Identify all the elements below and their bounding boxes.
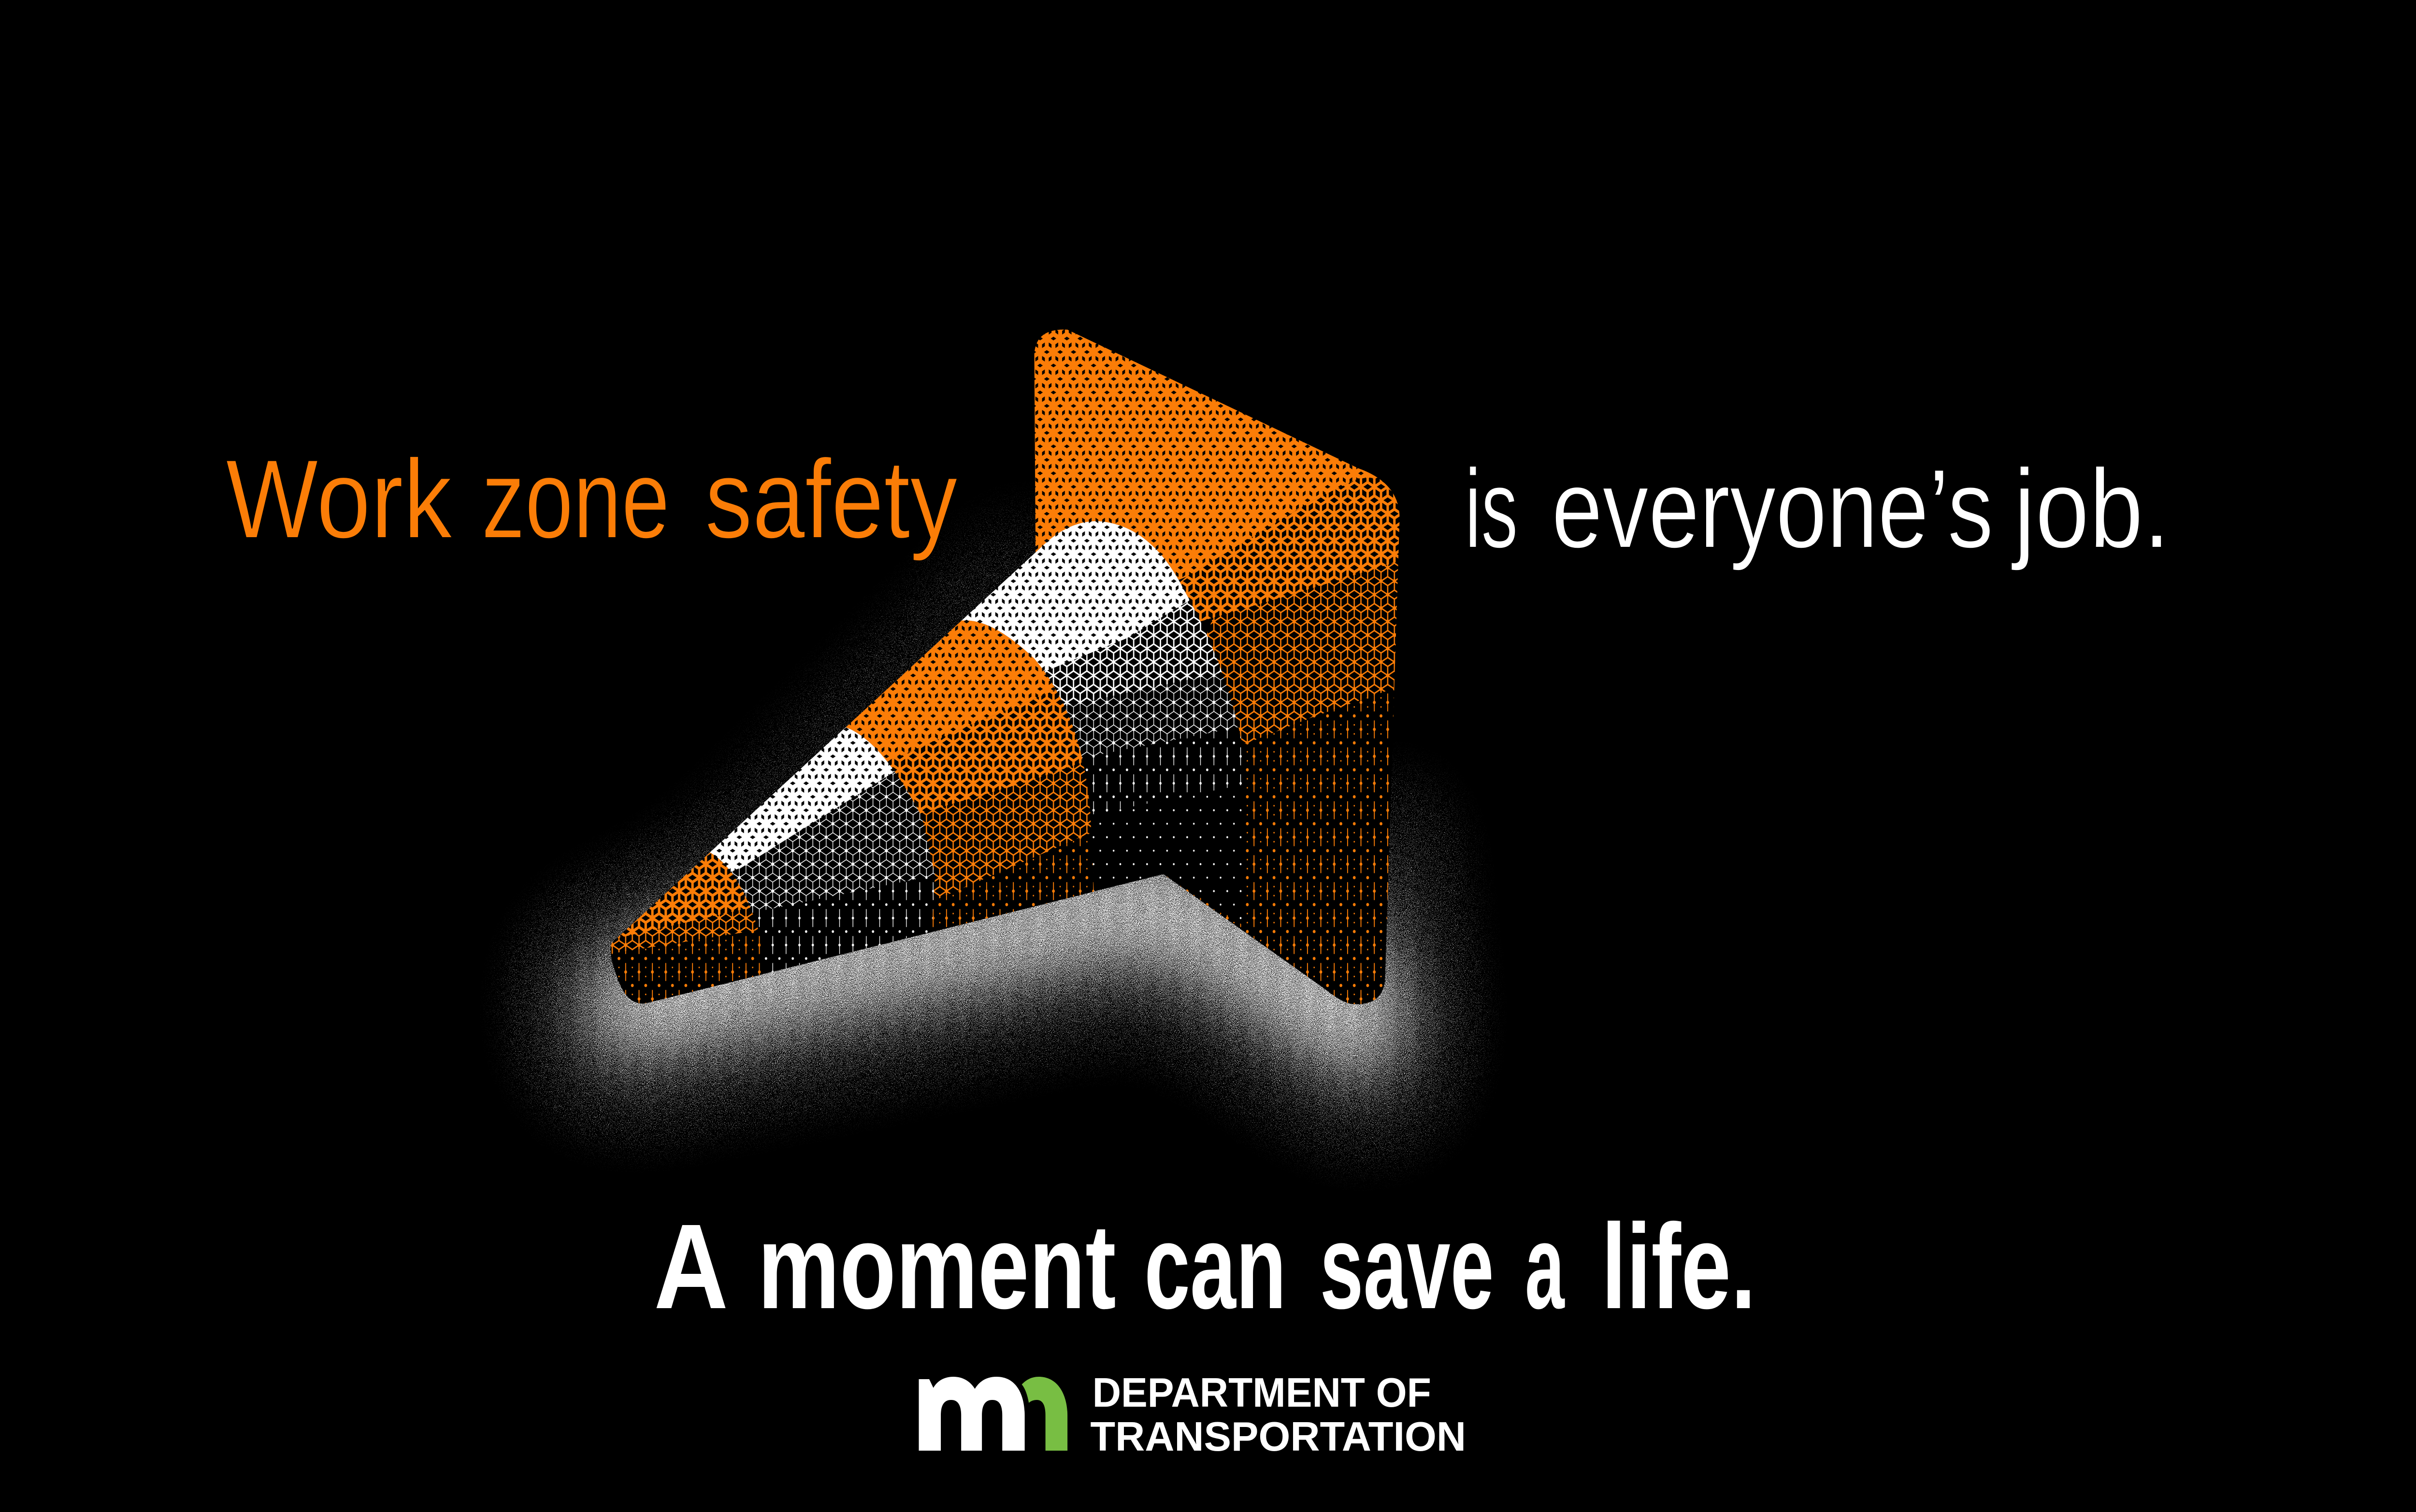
cone band: orange tip [581, 821, 789, 1039]
cone band: lower white stripe [581, 700, 976, 1039]
cone band: middle orange stripe [611, 620, 1094, 1004]
tagline: A moment can save a life.: A [654, 1199, 728, 1334]
heading: Work zone safety: Work [226, 436, 453, 561]
heading: Work zone safety [226, 436, 957, 561]
heading: Work zone safety: zone [482, 436, 670, 561]
heading: is everyone's job.: job. [2011, 446, 2170, 571]
tagline: A moment can save a life.: moment [758, 1199, 1116, 1334]
tagline: A moment can save a life. [654, 1199, 1756, 1334]
heading: Work zone safety: safety [705, 436, 957, 561]
heading: is everyone's job.: everyone’s [1552, 446, 1993, 571]
cone band: upper white stripe [611, 521, 1242, 1004]
logo text [1090, 1369, 1466, 1459]
traffic cone [611, 329, 1399, 1004]
tagline: A moment can save a life.: a [1525, 1199, 1565, 1334]
icon: white m [919, 1377, 1025, 1451]
tagline: A moment can save a life.: life. [1601, 1199, 1756, 1334]
heading: is everyone's job.: is [1465, 446, 1518, 571]
logo: MnDOT [919, 1369, 1466, 1459]
logo text: TRANSPORTATION [1090, 1413, 1466, 1459]
panel: cone base [1034, 329, 1399, 1004]
tagline: A moment can save a life.: can [1144, 1199, 1286, 1334]
tagline: A moment can save a life.: save [1320, 1199, 1494, 1334]
grainy ground glow [618, 556, 1391, 1029]
logo text: DEPARTMENT OF [1093, 1369, 1431, 1415]
icon: green n [1022, 1377, 1067, 1451]
heading: is everyone's job. [1465, 446, 2170, 571]
